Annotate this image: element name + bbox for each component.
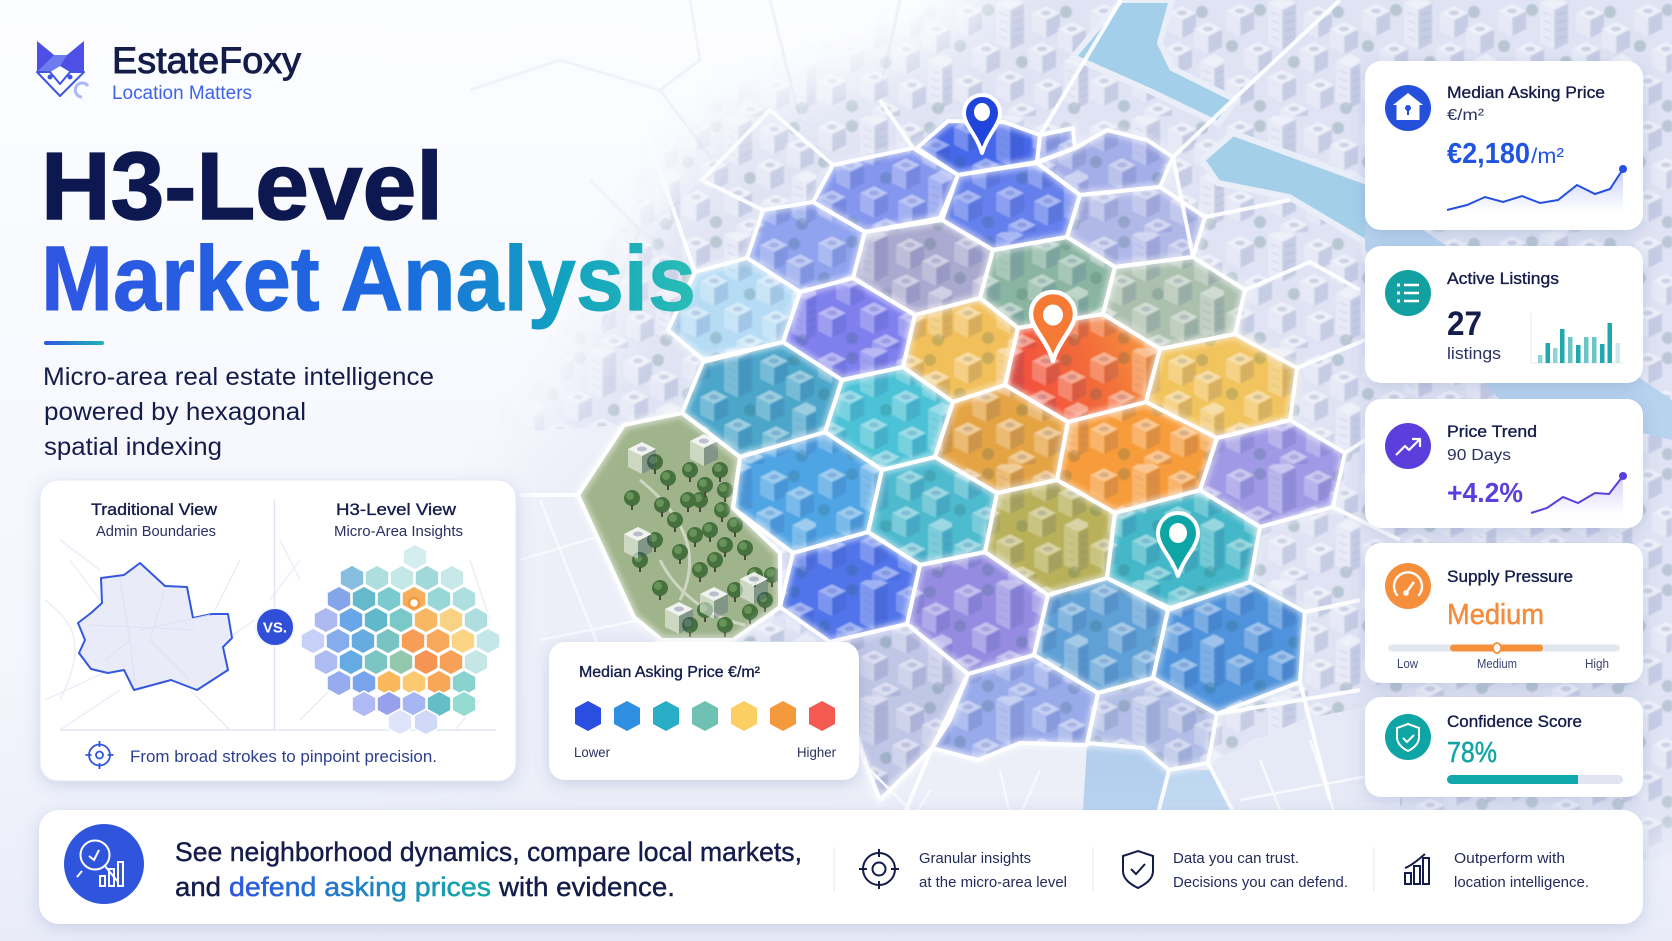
mini pin [409, 598, 419, 608]
value unit: /m² [1531, 145, 1564, 168]
icon: magnifier with bars [64, 824, 144, 904]
canal behind cards [1365, 216, 1672, 440]
card [549, 642, 859, 780]
sparkline [1447, 165, 1627, 212]
caption: From broad strokes to pinpoint precision. [130, 747, 437, 766]
pin: teal [1158, 513, 1198, 576]
VS badge [256, 608, 294, 646]
panel: traditional vs H3 comparison [40, 480, 516, 781]
city map with H3 hexagons [534, 0, 1672, 860]
legend title: Median Asking Price €/m² [579, 664, 760, 681]
white road network [520, 0, 1400, 860]
value: €2,180 [1447, 138, 1530, 170]
panel: legend [549, 642, 859, 780]
card [1365, 246, 1643, 383]
brand name: EstateFoxy [112, 40, 302, 81]
heading: H3: H3-Level View [336, 500, 457, 519]
subheading: H3: Micro-Area Insights [334, 523, 463, 540]
south water [1083, 746, 1166, 810]
higher label: Higher [797, 744, 836, 760]
icon: trend arrow [1385, 423, 1431, 469]
slider labels: High [1585, 657, 1609, 671]
feature: granular insights [859, 849, 1067, 891]
progress bar [1447, 775, 1623, 784]
pin: teal centre [1169, 523, 1187, 543]
title line 1: H3-Level [41, 133, 443, 240]
faint street network [45, 540, 500, 730]
heading: Supply Pressure [1447, 568, 1573, 586]
hexagon colour fields [668, 121, 1345, 800]
south street grid [525, 500, 1365, 810]
feature text: Decisions you can defend. [1173, 874, 1348, 891]
message [175, 837, 802, 902]
pin: orange centre [1043, 304, 1063, 326]
subtitle: Micro-area real estate intelligence [43, 363, 434, 391]
street-only zone south west [480, 426, 1087, 810]
title line 2: Market Analysis [41, 228, 696, 330]
icon: target [859, 849, 899, 889]
slider [1388, 643, 1620, 653]
message: defend asking prices [229, 872, 491, 902]
hexagon white borders [578, 121, 1345, 800]
park hexagon [578, 413, 780, 640]
value unit: listings [1447, 344, 1501, 363]
feature: data you can trust [1123, 850, 1348, 891]
value: Medium [1447, 599, 1544, 631]
buildings inside hexagons [671, 123, 1342, 794]
title [41, 133, 696, 330]
message: with evidence. [498, 872, 675, 902]
icon: bars [1405, 854, 1429, 884]
card [1365, 61, 1643, 230]
south water east [1160, 770, 1230, 810]
feature text [919, 850, 1067, 891]
card [1365, 543, 1643, 683]
divider [61, 499, 496, 730]
slider labels: Medium [1477, 657, 1517, 671]
tagline: Location Matters [112, 83, 252, 104]
dividers [834, 847, 1374, 892]
logo [37, 40, 302, 104]
icon: house [1385, 85, 1431, 131]
feature text: Data you can trust. [1173, 850, 1299, 867]
slider labels: Low [1397, 657, 1419, 671]
card [40, 480, 516, 781]
panel: bottom banner [39, 810, 1643, 924]
panel: median asking price [1365, 61, 1643, 230]
pin: orange [1031, 292, 1075, 361]
map base [544, 0, 1672, 836]
hexagon soft white glow [578, 121, 1345, 800]
outer city blocks [536, 0, 1672, 859]
feature text: at the micro-area level [919, 874, 1067, 891]
feature: outperform [1405, 850, 1589, 891]
river lower branch [1202, 133, 1370, 245]
message: and [175, 872, 221, 902]
lower label: Lower [574, 744, 610, 760]
heading: traditional: Traditional View [91, 500, 218, 519]
bar chart [1531, 313, 1623, 363]
hexagon tint over buildings [668, 121, 1345, 800]
panel: active listings [1365, 246, 1643, 383]
heading: Median Asking Price [1447, 84, 1605, 102]
icon: list [1385, 270, 1431, 316]
pin: blue [964, 95, 1000, 153]
value: +4.2% [1447, 477, 1523, 508]
message: See neighborhood dynamics, compare local markets, [175, 837, 802, 867]
subtitle: spatial indexing [44, 433, 222, 461]
pin: blue centre [974, 103, 990, 121]
faint street grid on the left [470, 0, 930, 330]
heading: Price Trend [1447, 423, 1537, 441]
heading: Active Listings [1447, 270, 1559, 288]
card [1365, 697, 1643, 797]
icon: fox [37, 41, 88, 97]
panel: price trend [1365, 399, 1643, 528]
H3 hexagon cluster [301, 544, 500, 735]
feature text: Outperform with [1454, 850, 1565, 867]
heading: Confidence Score [1447, 713, 1582, 731]
value: 27 [1447, 305, 1482, 343]
subtitle: powered by hexagonal [44, 398, 306, 426]
feature text: location intelligence. [1454, 874, 1589, 891]
subtitle [43, 363, 434, 461]
icon: gauge [1385, 563, 1431, 609]
admin boundary shape [78, 563, 232, 690]
value: 78% [1447, 737, 1497, 769]
sparkline [1531, 472, 1627, 514]
subheading: traditional: Admin Boundaries [96, 523, 216, 540]
unit: €/m² [1447, 107, 1485, 124]
colour scale [575, 701, 835, 731]
card [39, 810, 1643, 924]
period: 90 Days [1447, 447, 1511, 464]
feature text [1173, 850, 1348, 891]
icon: shield [1123, 851, 1153, 888]
panel: confidence score [1365, 697, 1643, 797]
VS badge: VS. [263, 620, 287, 636]
panel: supply pressure [1365, 543, 1643, 683]
slider labels [1397, 657, 1609, 671]
icon: shield [1385, 714, 1431, 760]
feature text [1454, 850, 1589, 891]
feature text: Granular insights [919, 850, 1031, 867]
card [1365, 399, 1643, 528]
street-only zone south east [1214, 712, 1400, 810]
accent bar [44, 341, 104, 345]
icon: target [86, 741, 114, 769]
river [1073, 0, 1236, 124]
